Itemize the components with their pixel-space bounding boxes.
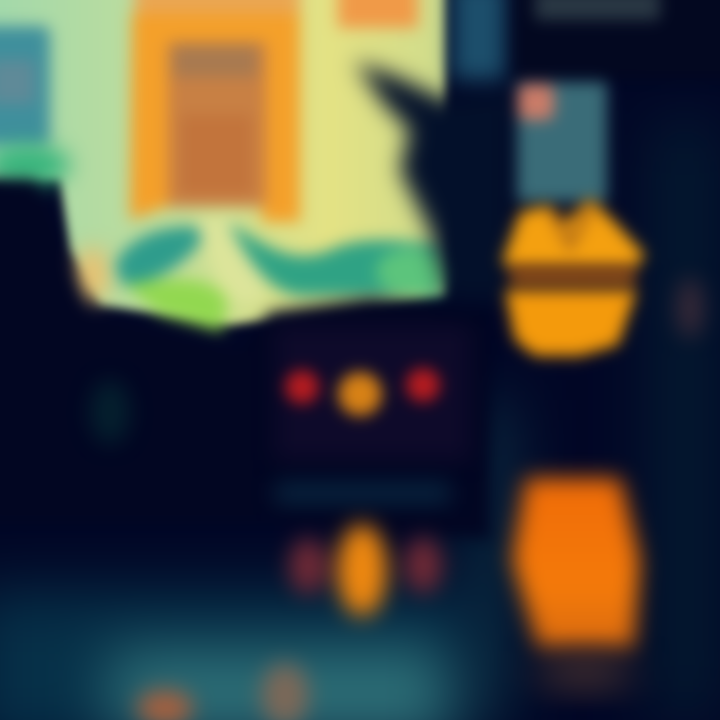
right reddish smudge [677,278,703,338]
warm glow on lower left wall [74,247,110,303]
floor warm spots [137,663,309,720]
burger lamp bottom [505,290,637,356]
top orange patch [338,0,418,28]
top right grey strip [535,0,660,20]
post [452,0,506,80]
right side dark teal haze [465,120,720,720]
door frame [130,0,300,222]
wall [0,0,445,325]
left dark teal smudge [90,380,130,444]
foreground dark mass [0,180,490,540]
traffic light reflections [289,524,442,616]
floor teal haze [0,590,470,720]
plants [115,216,448,332]
orange lamp reflection [512,478,640,648]
burger lamp top [502,198,645,268]
reflection fade [535,656,635,688]
tree silhouette [355,62,510,300]
blue stripe under box [275,482,450,504]
right dark column [514,0,720,78]
dark box [275,325,470,460]
sign panel [517,82,607,202]
traffic lights [285,368,440,416]
green shrub at left [0,145,70,185]
burger lamp gap [510,266,635,286]
left window [0,26,50,146]
